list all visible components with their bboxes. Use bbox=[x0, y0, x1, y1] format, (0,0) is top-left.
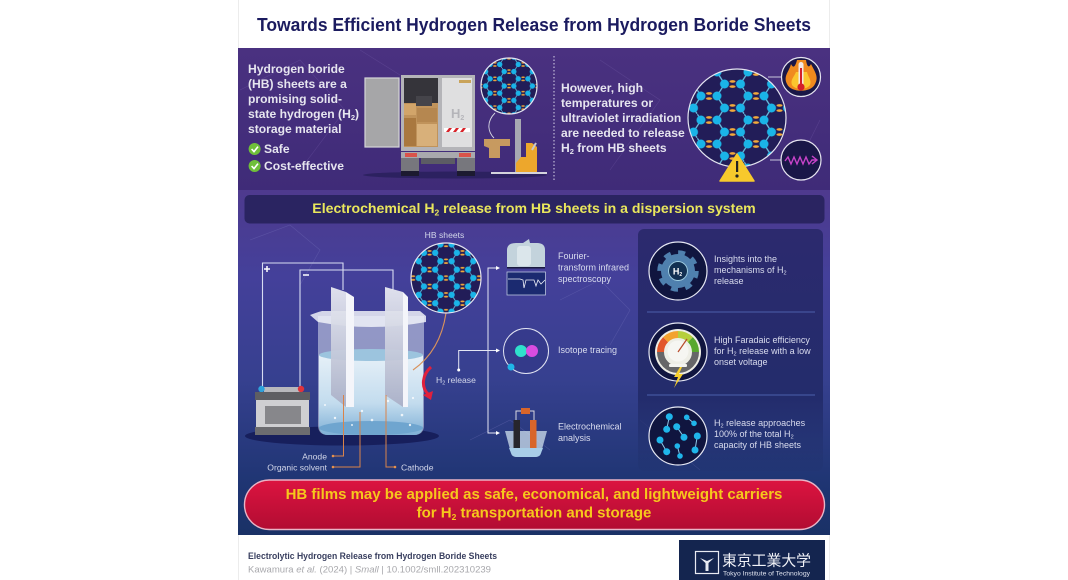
conclusion banner: transportation and storage bbox=[456, 504, 651, 522]
text: FTIR: transform infrared bbox=[558, 262, 629, 272]
text: release conditions: 2 bbox=[570, 147, 574, 156]
icon: forklift with boxes bbox=[484, 113, 547, 174]
text: mechanisms: 2 bbox=[784, 270, 787, 276]
text: FTIR: spectroscopy bbox=[558, 274, 612, 284]
icon: gear with H2 bbox=[649, 242, 707, 300]
icon: isotope tracing bbox=[504, 328, 548, 374]
icon: truck with open doors: H bbox=[451, 106, 460, 121]
text: HB sheets description: storage material bbox=[248, 122, 341, 136]
text: mechanisms: Insights into the bbox=[714, 254, 777, 264]
icon: HB sheets lattice circle bbox=[411, 243, 481, 313]
panel: outcomes bbox=[638, 229, 823, 471]
label: H2 release: H bbox=[436, 375, 442, 385]
checklist: safe and cost-effective: Cost-effective bbox=[264, 159, 344, 173]
labels: beaker components with leaders: Cathode bbox=[401, 462, 434, 472]
text: release conditions: However, high bbox=[561, 81, 643, 95]
labels: beaker components with leaders: Organic solvent bbox=[267, 462, 328, 472]
text: release conditions: temperatures or bbox=[561, 96, 653, 110]
text: FTIR bbox=[558, 251, 629, 284]
icon: thermometer in flames bbox=[782, 58, 820, 96]
text: faradaic efficiency bbox=[714, 335, 811, 367]
text: mechanisms: release bbox=[714, 276, 744, 286]
text: faradaic efficiency: release with a low bbox=[737, 346, 811, 356]
text: total capacity: release approaches bbox=[724, 418, 806, 428]
labels: beaker components with leaders: Anode bbox=[302, 452, 327, 462]
text: faradaic efficiency: 2 bbox=[734, 352, 737, 358]
icon: large HB lattice circle bbox=[688, 69, 786, 167]
text: release conditions: H bbox=[561, 141, 570, 155]
panel: hydrogen boride storage and its problem bbox=[238, 48, 830, 190]
logo: Tokyo Institute of Technology: 東京工業大学 bbox=[722, 550, 811, 570]
text: release conditions: are needed to release bbox=[561, 126, 685, 140]
text: electrochemical analysis: Electrochemical bbox=[558, 422, 622, 432]
panel: electrochemical release bbox=[238, 190, 830, 535]
connector arrows to analysis methods bbox=[457, 266, 500, 435]
labels: beaker components with leaders bbox=[267, 395, 434, 472]
arrow: hydrogen release bbox=[423, 367, 433, 400]
text: total capacity: H bbox=[714, 418, 720, 428]
conclusion banner: HB films may be applied as safe, economical, and lightweight carriers bbox=[286, 486, 782, 503]
icon: truck with open doors bbox=[363, 75, 547, 178]
icon: warning triangle bbox=[720, 154, 754, 181]
section heading: Electrochemical H bbox=[312, 200, 434, 216]
text: HB sheets description: ) bbox=[355, 107, 359, 121]
label: HB sheets: HB sheets bbox=[425, 230, 464, 240]
logo: Tokyo Institute of Technology: Tokyo Institute of Technology bbox=[723, 570, 811, 578]
icon: gear with H2: 2 bbox=[679, 272, 682, 278]
text: mechanisms bbox=[714, 254, 787, 286]
citation: Kawamura et al. (2024) | Small | 10.1002/smll.202310239 bbox=[248, 564, 491, 574]
text: HB sheets description: 2 bbox=[351, 113, 355, 122]
icon: small HB lattice circle bbox=[481, 58, 537, 114]
text: release conditions: from HB sheets bbox=[574, 141, 667, 155]
text: release conditions: ultraviolet irradiation bbox=[561, 111, 681, 125]
electrode: anode bbox=[331, 287, 354, 407]
icon: electrolysis beaker bbox=[245, 287, 439, 446]
text: HB sheets description: (HB) sheets are a bbox=[248, 77, 347, 91]
conclusion banner bbox=[244, 480, 824, 530]
citation: Electrolytic Hydrogen Release from Hydrogen Boride Sheets bbox=[248, 551, 497, 561]
title: Towards Efficient Hydrogen Release from Hydrogen Boride Sheets bbox=[257, 14, 811, 35]
text: total capacity: 2 bbox=[791, 434, 794, 440]
logo: Tokyo Institute of Technology bbox=[679, 540, 825, 580]
text: total capacity: 2 bbox=[720, 424, 724, 430]
wires from battery to electrodes bbox=[262, 263, 393, 388]
icon: gear with H2: H bbox=[673, 266, 679, 276]
checklist: safe and cost-effective bbox=[249, 142, 344, 173]
text: HB sheets description: promising solid- bbox=[248, 92, 342, 106]
section heading bbox=[244, 195, 824, 224]
text: faradaic efficiency: onset voltage bbox=[714, 357, 768, 367]
icon: truck with open doors: 2 bbox=[460, 115, 464, 122]
text: mechanisms: mechanisms of H bbox=[714, 265, 784, 275]
icon: efficiency gauge bbox=[649, 323, 707, 388]
text: faradaic efficiency: for H bbox=[714, 346, 734, 356]
electrode: cathode bbox=[385, 287, 408, 407]
text: total capacity bbox=[714, 418, 806, 450]
text: FTIR: Fourier- bbox=[558, 251, 590, 261]
citation bbox=[248, 551, 497, 574]
section heading: release from HB sheets in a dispersion system bbox=[439, 200, 756, 216]
text: isotope tracing: Isotope tracing bbox=[558, 345, 617, 355]
label: H2 release: release bbox=[445, 375, 476, 385]
section heading: 2 bbox=[434, 208, 440, 218]
text: HB sheets description: state hydrogen (H bbox=[248, 107, 351, 121]
icon: FTIR spectrometer bbox=[507, 239, 546, 295]
icon: hydrogen molecules bbox=[649, 407, 707, 465]
text: total capacity: capacity of HB sheets bbox=[714, 440, 802, 450]
icon: battery bbox=[255, 386, 310, 435]
icon: ultraviolet wave bbox=[781, 140, 821, 180]
text: HB sheets description bbox=[248, 62, 359, 136]
text: total capacity: 100% of the total H bbox=[714, 429, 791, 439]
text: faradaic efficiency: High Faradaic efficiency bbox=[714, 335, 810, 345]
callout line from HB sheets to dispersion bbox=[413, 313, 446, 370]
text: electrochemical analysis bbox=[558, 422, 622, 443]
text: electrochemical analysis: analysis bbox=[558, 433, 591, 443]
text: release conditions bbox=[561, 81, 685, 156]
text: HB sheets description: Hydrogen boride bbox=[248, 62, 345, 76]
label: H2 release: 2 bbox=[442, 380, 445, 386]
checklist: safe and cost-effective: Safe bbox=[264, 142, 290, 156]
icon: electrochemical cell bbox=[505, 408, 547, 457]
conclusion banner: for H bbox=[417, 504, 452, 522]
conclusion banner: 2 bbox=[452, 512, 457, 522]
